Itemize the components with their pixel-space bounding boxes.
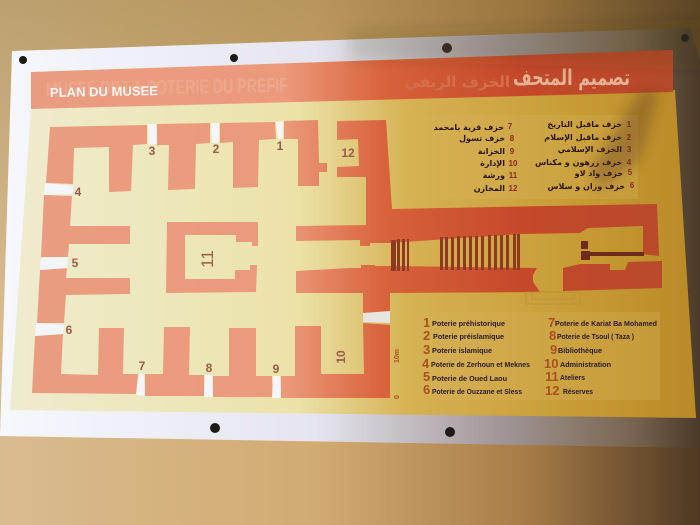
room numbers: 2 (213, 142, 220, 156)
arabic legend: خزف ماقبل الإسلام (544, 133, 622, 142)
arabic legend: 9 (510, 147, 515, 156)
arabic legend: 3 (627, 145, 632, 154)
room numbers: 6 (66, 323, 73, 337)
screws (19, 34, 689, 437)
french legend: Poterie de Oued Laou (432, 374, 507, 383)
arabic legend: خزف ماقبل التاريخ (547, 120, 622, 129)
french legend: Poterie islamique (432, 346, 492, 355)
poster sheet (0, 28, 700, 448)
arabic legend: 6 (630, 181, 635, 190)
arabic legend: 2 (627, 133, 632, 142)
floor plan walls (32, 120, 662, 398)
french legend: 5 (423, 369, 430, 384)
french legend: 11 (545, 369, 559, 384)
arabic legend: الخزف الإسلامي (558, 145, 622, 154)
french legend: Réserves (563, 387, 593, 396)
entrance steps outline (526, 292, 580, 304)
french legend: 8 (549, 328, 556, 343)
arabic legend: ورشة (483, 171, 505, 180)
french legend: Bibliothèque (558, 346, 602, 355)
room numbers: 8 (206, 361, 213, 375)
arabic legend: 7 (508, 122, 513, 131)
doorways (35, 121, 390, 398)
room numbers: 7 (139, 359, 146, 373)
room numbers: 1 (277, 139, 284, 153)
french legend: Poterie de Tsoul ( Taza ) (557, 332, 634, 341)
arabic legend: 11 (509, 171, 518, 180)
arabic legend: خزف تسول (459, 134, 505, 143)
title banner (31, 50, 673, 109)
french legend: 1 (423, 315, 430, 330)
french legend: Poterie préislamique (433, 332, 504, 341)
french legend: 12 (545, 383, 559, 398)
faded arabic subtitle: الخزف الريفي (405, 73, 510, 91)
scale bar (394, 349, 401, 399)
french legend: 3 (423, 342, 430, 357)
room numbers: 3 (149, 144, 156, 158)
arabic legend: 4 (627, 158, 632, 167)
shadow overlay (350, 20, 700, 190)
arabic title: تصميم المتحف (513, 66, 630, 91)
french legend: 2 (423, 328, 430, 343)
french legend: Poterie préhistorique (432, 319, 505, 328)
french legend: Poterie de Zerhoun et Meknes (431, 360, 530, 369)
arabic legend: 10 (509, 159, 518, 168)
french legend: 6 (423, 382, 430, 397)
room numbers (66, 139, 355, 376)
arabic legend: الخزانة (478, 147, 505, 156)
french legend: Poterie de Ouzzane et Sless (432, 387, 522, 396)
scale bar: 10m (394, 349, 401, 363)
french legend: Ateliers (560, 373, 585, 382)
room numbers: 10 (334, 350, 348, 364)
arabic legend: خزف قرية بامحمد (434, 123, 504, 132)
french legend: 4 (422, 356, 430, 371)
room numbers: 5 (72, 256, 79, 270)
arabic legend: 1 (627, 120, 632, 129)
french legend: 10 (544, 356, 558, 371)
room numbers: 4 (75, 185, 82, 199)
arabic legend: خزف زرهون و مكناس (535, 158, 622, 168)
french legend (415, 312, 660, 400)
arabic legend: خزف وزان و سلاس (548, 182, 625, 192)
french legend: 7 (548, 315, 555, 330)
scale bar: 0 (394, 395, 401, 399)
arabic legend: الإدارة (480, 159, 505, 168)
room numbers: 9 (273, 362, 280, 376)
french legend: Administration (560, 360, 611, 369)
arabic legend: خزف واد لاو (574, 169, 623, 178)
arabic legend: المخازن (474, 184, 505, 193)
dark end room features (581, 241, 644, 260)
corridor stripes (391, 234, 520, 271)
arabic legend: 12 (509, 184, 518, 193)
arabic legend: 5 (628, 168, 633, 177)
french legend: Poterie de Kariat Ba Mohamed (555, 319, 657, 328)
room numbers: 12 (341, 146, 355, 160)
arabic legend (413, 115, 638, 199)
poster yellow background (10, 90, 696, 418)
arabic legend: 8 (510, 134, 515, 143)
faded banner title: MUSEE DE LA POTERIE DU PREFIF (46, 75, 288, 101)
plan heading: PLAN DU MUSEE (50, 83, 158, 100)
room numbers: 11 (198, 250, 217, 268)
french legend: 9 (550, 342, 557, 357)
